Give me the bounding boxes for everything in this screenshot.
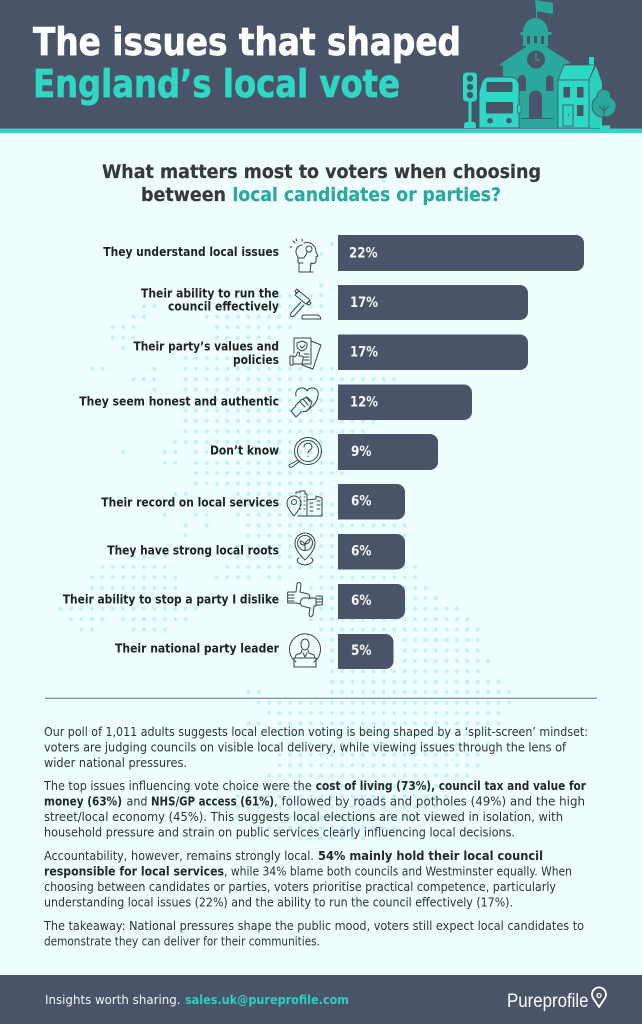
row: don't know: 9% <box>351 444 372 460</box>
bar chart: what matters most to voters <box>63 235 584 669</box>
chart heading: local candidates or parties? <box>232 185 501 206</box>
icon: document with thumbs up <box>290 338 321 369</box>
paragraph: poll summary: voters are judging councils on visible local delivery, while viewing issues through the lens of <box>44 740 567 754</box>
title: England’s local vote <box>33 62 400 106</box>
footer contact line <box>45 993 349 1007</box>
body text <box>43 725 588 948</box>
paragraph: accountability: Accountability, however, remains strongly local. <box>44 849 314 863</box>
paragraph: top issues: , followed by roads and potholes (49%) and the high <box>274 794 585 808</box>
paragraph: top issues: money (63%) <box>44 794 122 808</box>
icon: map pin with plant <box>295 533 315 565</box>
paragraph: top issues: household pressure and strain on public services clearly influencing local decisions. <box>44 826 515 840</box>
paragraph: poll summary: Our poll of 1,011 adults suggests local election voting is being shaped by a ‘split-screen’ mindset: <box>44 725 588 739</box>
row: party's values and policies: policies <box>233 352 279 367</box>
row: stop a party I dislike: 6% <box>351 593 372 609</box>
row: strong local roots <box>107 533 405 570</box>
paragraph: top issues: The top issues influencing vote choice were the <box>43 779 312 793</box>
icon: thumbs up and thumbs down <box>288 583 322 616</box>
paragraph: top issues: street/local economy (45%). This suggests local elections are not viewed in isolation, with <box>44 810 563 824</box>
paragraph: accountability: , while 34% blame both councils and Westminster equally. When <box>224 864 572 878</box>
footer contact line: sales.uk@pureprofile.com <box>185 993 349 1007</box>
title <box>33 20 461 106</box>
row: ability to run the council: Their ability to run the <box>141 285 279 300</box>
footer contact line: Insights worth sharing. <box>45 993 180 1007</box>
paragraph: accountability <box>44 849 572 910</box>
row: party's values and policies: Their party’s values and <box>134 339 279 354</box>
row: understand local issues: 22% <box>349 246 378 262</box>
icon: heart and hand <box>291 388 318 417</box>
row: party's values and policies: 17% <box>350 344 378 360</box>
icon: gavel <box>290 289 321 319</box>
logo: Pureprofile: Pureprofile <box>507 991 588 1012</box>
icon: magnifier with question mark <box>289 438 322 467</box>
icon: head with light bulb <box>290 239 318 272</box>
row: strong local roots: They have strong local roots <box>107 542 279 557</box>
paragraph: top issues: and <box>126 794 148 808</box>
illustration: town hall, bus, house, tree and traffic light <box>463 0 616 128</box>
icon: speaker at a lectern in a circle <box>289 634 320 667</box>
icon: map pin and city buildings <box>287 491 322 516</box>
row: record on local services: Their record on local services <box>101 495 279 510</box>
paragraph: takeaway: demonstrate they can deliver for their communities. <box>44 934 320 948</box>
row: understand local issues: They understand local issues <box>103 244 279 259</box>
row: understand local issues <box>103 235 584 272</box>
paragraph: top issues: NHS/GP access (61%) <box>151 794 274 808</box>
footer <box>0 975 642 1024</box>
paragraph: accountability: understanding local issues (22%) and the ability to run the council effectively (17%). <box>44 896 513 910</box>
paragraph: accountability: choosing between candidates or parties, voters prioritise practical competence, particularly <box>44 880 556 894</box>
title: The issues that shaped <box>33 20 461 64</box>
paragraph: poll summary: wider national pressures. <box>44 756 187 770</box>
row: honest and authentic: They seem honest and authentic <box>79 393 279 408</box>
paragraph: top issues <box>43 779 586 840</box>
row: party's values and policies <box>134 334 528 370</box>
row: stop a party I dislike <box>63 583 405 619</box>
row: stop a party I dislike: Their ability to stop a party I dislike <box>63 591 279 606</box>
row: don't know <box>210 434 438 470</box>
paragraph: top issues: cost of living (73%), council tax and value for <box>316 779 586 793</box>
header banner <box>0 0 642 133</box>
row: honest and authentic <box>79 384 472 420</box>
paragraph: accountability: 54% mainly hold their local council <box>318 849 543 863</box>
chart heading: between <box>141 185 226 206</box>
paragraph: accountability: responsible for local services <box>44 864 224 878</box>
paragraph: takeaway: The takeaway: National pressures shape the public mood, voters still expect local candidates to <box>43 919 584 933</box>
divider <box>45 698 597 699</box>
row: national party leader: Their national party leader <box>115 641 280 656</box>
row: ability to run the council <box>141 285 528 320</box>
row: honest and authentic: 12% <box>350 394 378 410</box>
chart heading: What matters most to voters when choosing <box>102 162 541 183</box>
row: don't know: Don’t know <box>210 443 279 458</box>
paragraph: poll summary <box>44 725 588 770</box>
row: record on local services: 6% <box>351 494 372 510</box>
row: national party leader <box>115 634 394 669</box>
paragraph: takeaway <box>43 919 584 948</box>
row: record on local services <box>101 484 405 520</box>
row: strong local roots: 6% <box>351 544 372 560</box>
row: national party leader: 5% <box>351 643 372 659</box>
row: ability to run the council: council effectively <box>168 299 279 314</box>
row: ability to run the council: 17% <box>350 295 378 311</box>
chart heading <box>102 162 541 206</box>
